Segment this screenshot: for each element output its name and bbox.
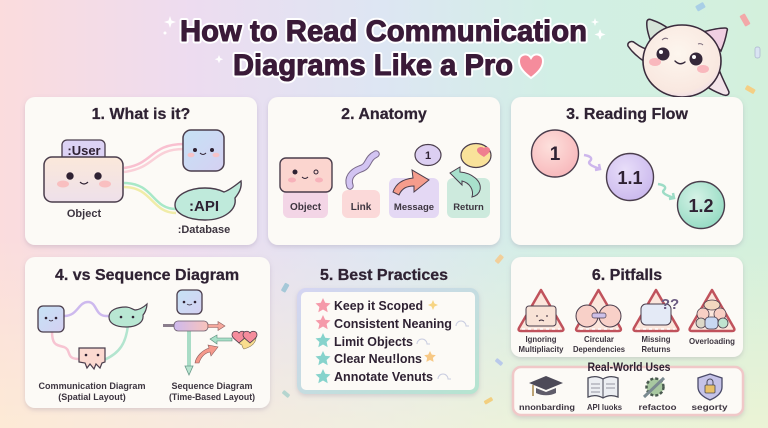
title bbox=[180, 15, 587, 82]
panel: 6. Pitfalls bbox=[511, 257, 743, 357]
node 1.2 bbox=[678, 182, 724, 228]
item: Return bbox=[447, 144, 491, 218]
use: API docs bbox=[587, 377, 622, 412]
sequence diagram bbox=[163, 290, 257, 375]
label: :User: :User bbox=[67, 143, 101, 158]
item: Object bbox=[280, 158, 332, 218]
item: Link: Link bbox=[351, 202, 372, 213]
panel: 4. vs Sequence Diagram bbox=[25, 257, 270, 408]
item: Message: Message bbox=[394, 202, 434, 213]
pitfall: Ignoring Multiplicity: Ignoring bbox=[526, 334, 556, 344]
label: Communication Diagram: (Spatial Layout) bbox=[58, 392, 126, 402]
item: Link bbox=[342, 154, 380, 218]
label: Object: Object bbox=[67, 208, 101, 220]
label: Communication Diagram bbox=[38, 381, 146, 402]
links: object connections bbox=[124, 144, 184, 213]
panel: 5. Best Practices bbox=[299, 267, 477, 392]
pitfall: Circular Dependencies bbox=[573, 290, 625, 354]
item: Annotate Venuts: Annotate Venuts bbox=[334, 369, 433, 384]
object: :API bubble: :API bbox=[189, 198, 219, 215]
use: refactoring bbox=[638, 378, 676, 412]
label: Communication Diagram: Communication Diagram bbox=[38, 381, 146, 392]
item: Clear Neulionk: Clear Neu!lons bbox=[334, 351, 422, 366]
object: blue square bbox=[183, 130, 224, 171]
title: How to Read Communication bbox=[180, 15, 587, 48]
heading: What is it: 1. What is it? bbox=[92, 106, 190, 123]
use: onboarding bbox=[519, 376, 575, 412]
heading: Anatomy: 2. Anatomy bbox=[341, 106, 427, 123]
icon: heart bbox=[519, 54, 543, 78]
item: Consistent Neaning: Consistent Neaning bbox=[334, 316, 452, 331]
arrow: 1 to 1.1 bbox=[584, 155, 600, 170]
item: Message: 1 bbox=[425, 150, 431, 162]
panel: 3. Reading Flow bbox=[511, 97, 743, 245]
node 1.2: 1.2 bbox=[688, 196, 714, 216]
title: How to Read Communication bbox=[180, 15, 587, 48]
node 1.1: 1.1 bbox=[617, 168, 643, 188]
heading: vs Sequence Diagram: 4. vs Sequence Diagram bbox=[55, 267, 239, 284]
pitfall: Missing Returns: Missing bbox=[642, 334, 670, 344]
label: :User bbox=[62, 140, 105, 170]
heading: Real-World Uses: Real-World Uses bbox=[588, 360, 671, 374]
list card bbox=[299, 290, 477, 392]
title: Diagrams Like a Pro bbox=[233, 49, 513, 82]
object: peach box bbox=[44, 157, 123, 202]
use: onboarding: nnonbarding bbox=[519, 402, 575, 412]
label: Sequence Diagram bbox=[169, 381, 255, 402]
communication diagram bbox=[38, 302, 147, 369]
heading: Best Practices: 5. Best Practices bbox=[320, 267, 448, 284]
pitfall: Ignoring Multiplicity bbox=[518, 290, 564, 354]
arrow: 1.1 to 1.2 bbox=[658, 184, 674, 199]
confetti bbox=[281, 2, 760, 405]
sparkles around title bbox=[164, 16, 606, 63]
panel: 2. Anatomy bbox=[268, 97, 500, 245]
item: Object: Object bbox=[290, 202, 322, 213]
pitfall: Circular Dependencies: Circular bbox=[584, 334, 615, 344]
pitfall: Overloading: Overloading bbox=[689, 336, 735, 346]
item: Message bbox=[389, 144, 441, 218]
label: Sequence Diagram: Sequence Diagram bbox=[172, 381, 252, 392]
node 1.1 bbox=[606, 154, 654, 200]
pitfall: Circular Dependencies: Dependencies bbox=[573, 344, 625, 354]
pitfall: Missing Returns: ?? bbox=[661, 296, 679, 313]
mascot bbox=[628, 19, 729, 97]
label: Sequence Diagram: (Time-Based Layout) bbox=[169, 392, 255, 402]
panel: Real-World Uses bbox=[513, 360, 743, 415]
pitfall: Missing Returns: Returns bbox=[642, 344, 671, 354]
node 1 bbox=[532, 130, 578, 177]
use: API docs: API luoks bbox=[587, 402, 622, 412]
item: Return: Return bbox=[453, 202, 484, 213]
item: Limit Objects bbox=[316, 333, 430, 349]
pitfall: Missing Returns bbox=[634, 290, 679, 354]
node 1: 1 bbox=[550, 144, 561, 165]
use: security: segorty bbox=[692, 402, 728, 412]
pitfall: Ignoring Multiplicity: Multipliacity bbox=[518, 344, 564, 354]
panel: 1. What is it? bbox=[25, 97, 257, 245]
item: Keep it Scoped: Keep it Scoped bbox=[334, 298, 423, 313]
pitfall: Overloading bbox=[689, 290, 735, 346]
title: Diagrams Like a Pro bbox=[233, 49, 513, 82]
object: :API bubble bbox=[175, 181, 241, 220]
heading: Reading Flow: 3. Reading Flow bbox=[566, 106, 688, 123]
use: refactoring: refactoo bbox=[638, 402, 676, 412]
item: Limit Objects: Limit Objects bbox=[334, 334, 413, 349]
heading: Pitfalls: 6. Pitfalls bbox=[592, 267, 662, 284]
label: :Database: :Database bbox=[178, 224, 230, 236]
use: security bbox=[692, 374, 728, 412]
